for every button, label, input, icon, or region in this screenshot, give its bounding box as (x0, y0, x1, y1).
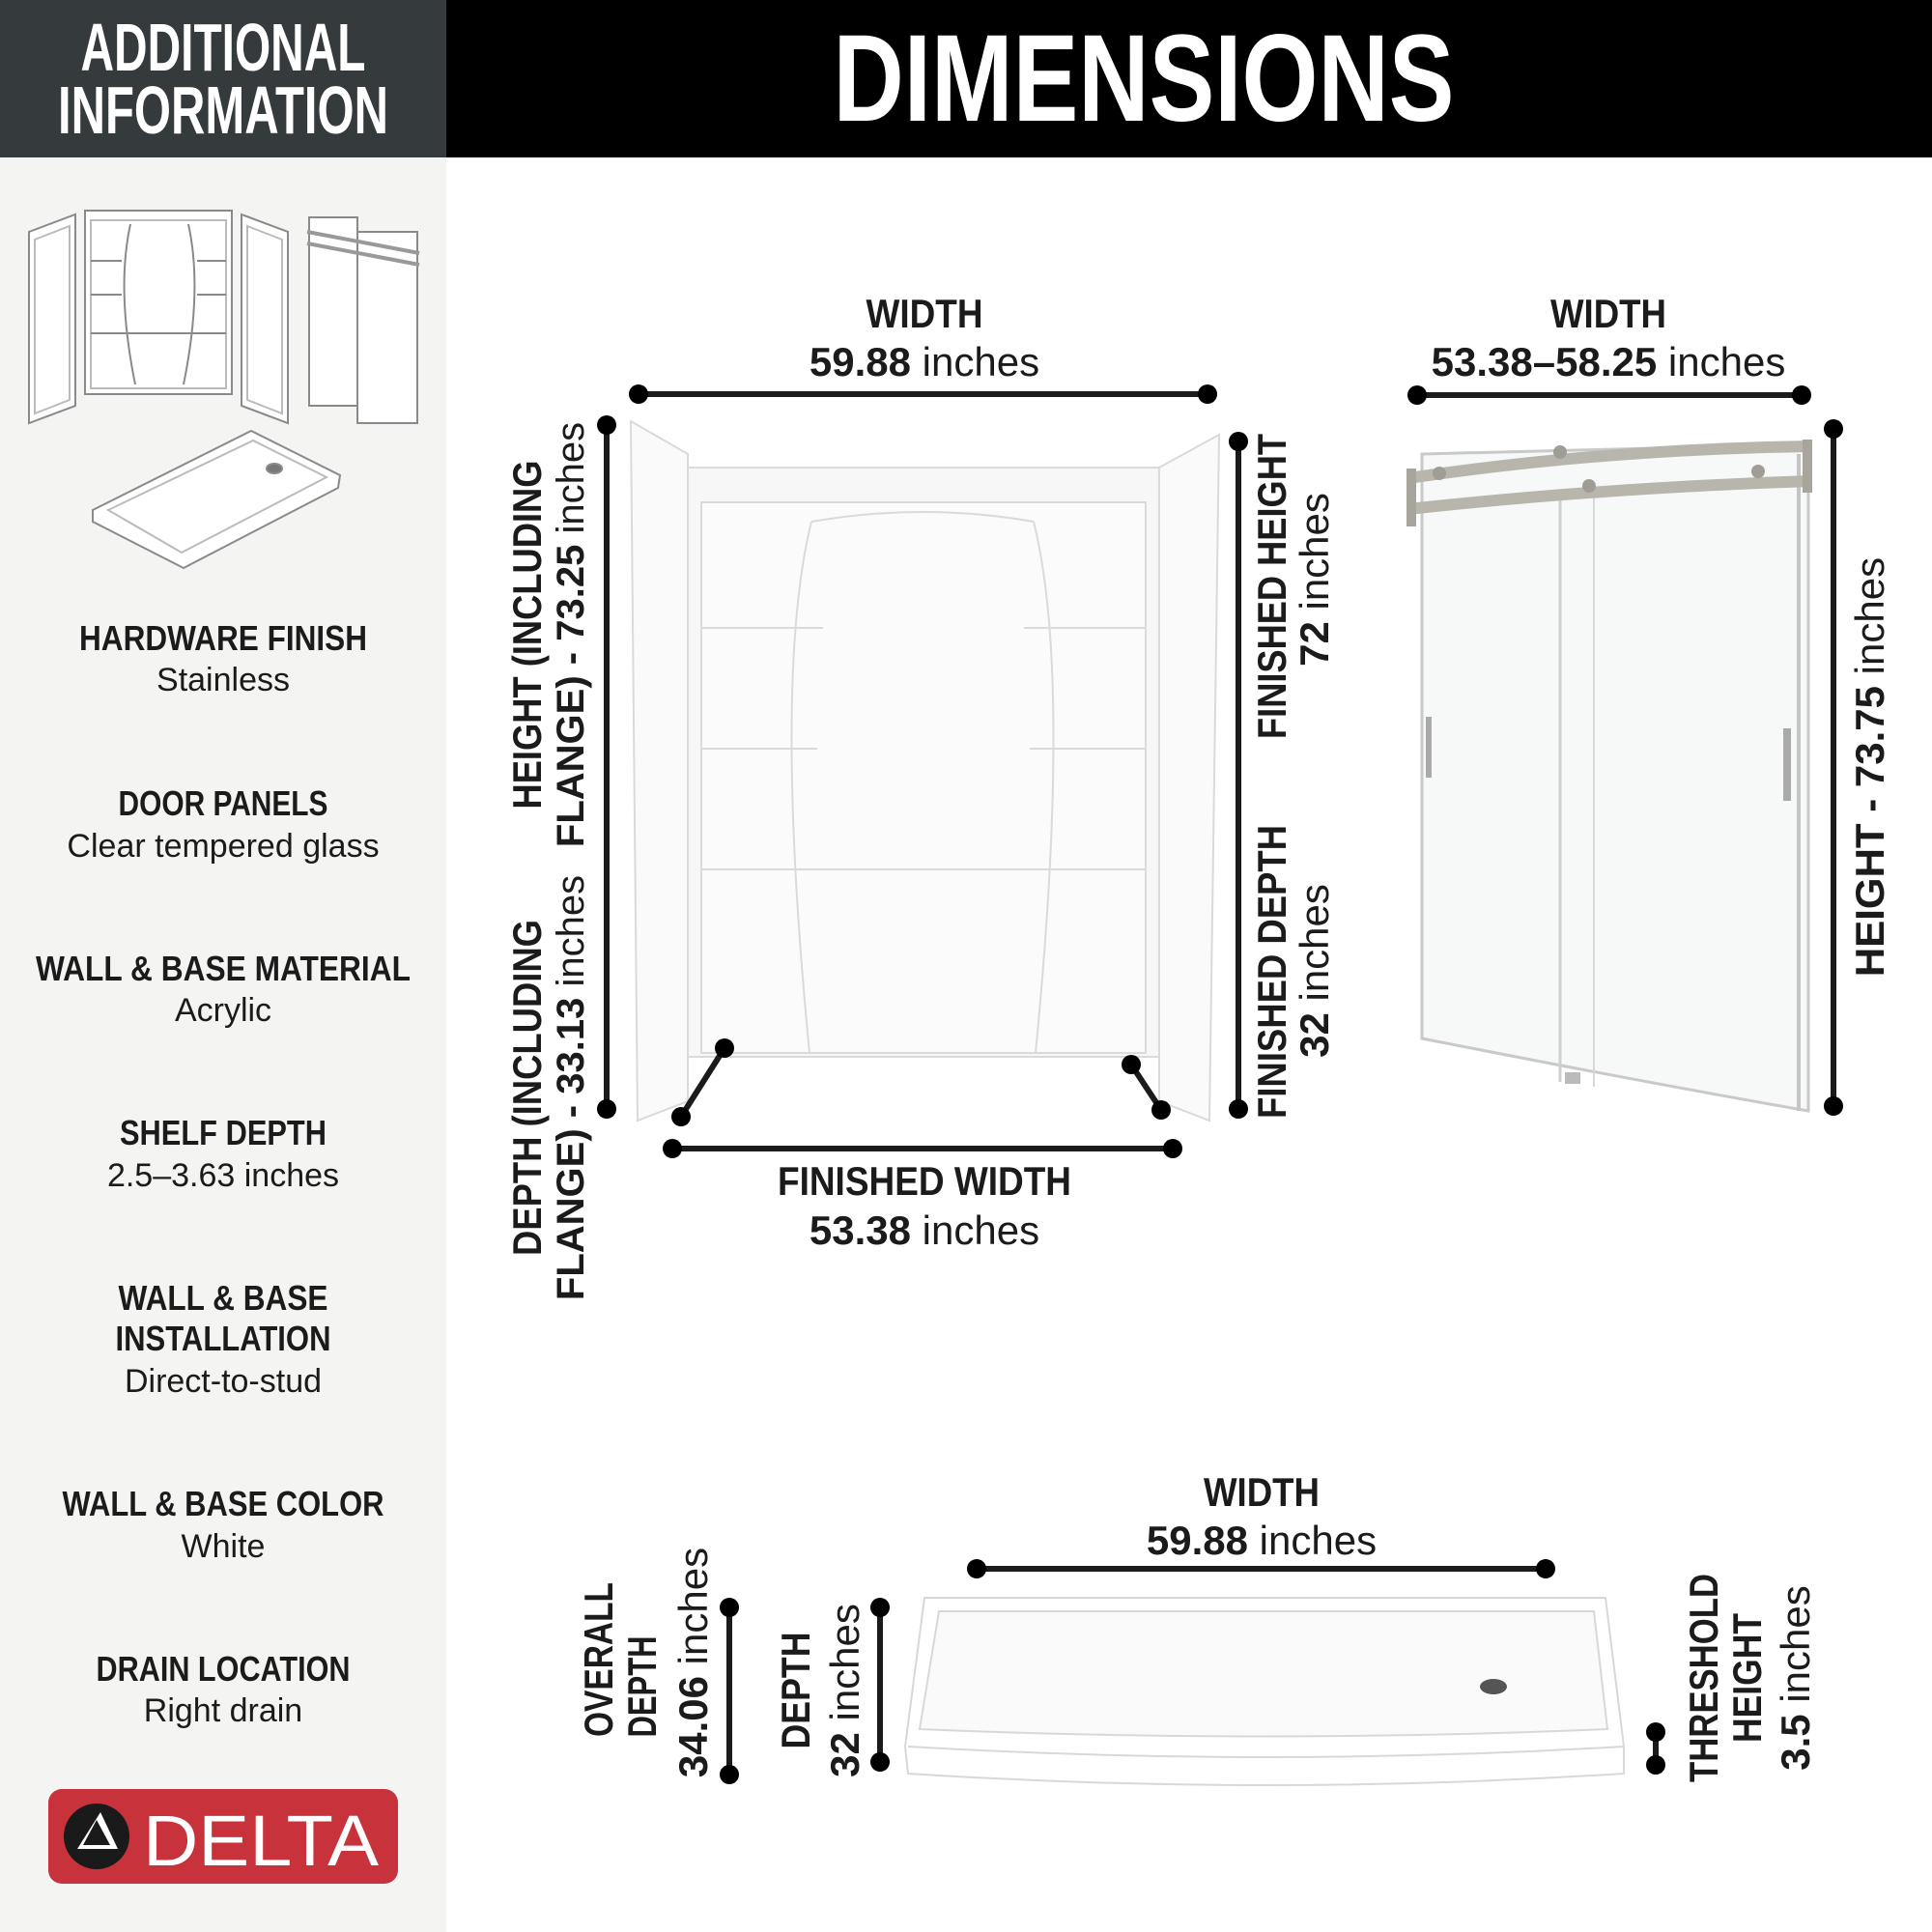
dimension: base width: 59.88 inches (1147, 1518, 1377, 1563)
text block: wall & base color: White (182, 1528, 265, 1565)
dimension: threshold height: THRESHOLD (1681, 1574, 1726, 1782)
dimension: height including flange (504, 415, 616, 1119)
header: additional information: ADDITIONAL (81, 10, 365, 85)
text block: wall & base material: Acrylic (175, 992, 271, 1029)
dimension: finished width: 53.38 inches (810, 1208, 1039, 1253)
text block: wall & base color: WALL & BASE COLOR (62, 1484, 384, 1523)
illustration: sliding glass door (1406, 440, 1812, 1111)
dimension: door height (1824, 419, 1892, 1116)
dimension: base width (967, 1469, 1555, 1578)
text block: wall & base color (62, 1484, 384, 1565)
dimension: base depth: 32 inches (822, 1604, 867, 1777)
text block: door panels (67, 783, 380, 865)
dimension: width 59.88: 59.88 inches (810, 339, 1039, 384)
logo: delta (48, 1789, 398, 1884)
sidebar background (0, 0, 446, 1932)
dimension: width 59.88: WIDTH (866, 291, 983, 336)
text block: shelf depth: SHELF DEPTH (120, 1113, 327, 1152)
dimension: finished height: 72 inches (1292, 493, 1337, 667)
dimension: depth including flange: DEPTH (INCLUDING (504, 920, 550, 1256)
dimension: overall depth: OVERALL (576, 1582, 621, 1737)
dimension: finished width: FINISHED WIDTH (778, 1158, 1071, 1204)
dimension: base depth: DEPTH (773, 1633, 818, 1748)
text block: shelf depth: 2.5–3.63 inches (107, 1157, 339, 1194)
text block: door panels: DOOR PANELS (118, 783, 328, 823)
text block: drain location: Right drain (144, 1692, 302, 1729)
dimension: finished depth (1249, 825, 1337, 1119)
dimension: height including flange: FLANGE) - 73.25 inches (550, 422, 592, 847)
dimension: threshold height (1646, 1574, 1818, 1782)
dimension: door width: WIDTH (1550, 291, 1666, 336)
dimension: base width: WIDTH (1204, 1469, 1320, 1515)
header: additional information: INFORMATION (58, 72, 388, 148)
dimension: overall depth: 34.06 inches (670, 1548, 716, 1777)
dimension: base depth (773, 1598, 890, 1777)
dimension: depth including flange: FLANGE) - 33.13 inches (550, 875, 592, 1300)
dimension: door width (1407, 291, 1811, 405)
dimension: height including flange: HEIGHT (INCLUDING (504, 460, 550, 810)
dimension: door width: 53.38–58.25 inches (1432, 339, 1785, 384)
dimension: overall depth (576, 1548, 739, 1784)
text block: wall & base installation (116, 1278, 330, 1400)
text block: wall & base installation: Direct-to-stud (125, 1363, 322, 1400)
dimension: threshold height: 3.5 inches (1773, 1585, 1818, 1771)
dimension: door height: HEIGHT - 73.75 inches (1847, 557, 1892, 977)
text block: drain location (97, 1649, 350, 1729)
dimension: finished height: FINISHED HEIGHT (1249, 434, 1294, 739)
dimension: finished width (663, 1038, 1182, 1253)
text block: door panels: Clear tempered glass (67, 828, 380, 865)
header: dimensions title (446, 0, 1932, 157)
text block: wall & base material: WALL & BASE MATERIAL (36, 949, 411, 988)
text block: wall & base installation: WALL & BASE (118, 1278, 328, 1318)
illustration: shower base (905, 1598, 1624, 1785)
dimension: threshold height: HEIGHT (1724, 1613, 1770, 1743)
text block: shelf depth (107, 1113, 339, 1194)
dimension: finished depth: 32 inches (1292, 884, 1337, 1058)
text block: hardware finish: Stainless (156, 662, 290, 698)
dimension: depth including flange (504, 875, 592, 1300)
dimension: finished height (1229, 432, 1337, 1119)
text block: drain location: DRAIN LOCATION (97, 1649, 350, 1689)
text block: hardware finish (79, 618, 367, 698)
header: dimensions title: DIMENSIONS (833, 10, 1455, 148)
dimension: width 59.88 (629, 291, 1217, 404)
text block: hardware finish: HARDWARE FINISH (79, 618, 367, 658)
dimension: finished depth: FINISHED DEPTH (1249, 825, 1294, 1119)
text block: wall & base material (36, 949, 411, 1029)
icon: product line drawings (29, 211, 419, 568)
dimension: overall depth: DEPTH (619, 1636, 665, 1737)
header: additional information (0, 0, 446, 157)
logo: delta: DELTA (143, 1801, 380, 1881)
illustration: shower walls (631, 421, 1219, 1121)
text block: wall & base installation: INSTALLATION (116, 1319, 330, 1358)
